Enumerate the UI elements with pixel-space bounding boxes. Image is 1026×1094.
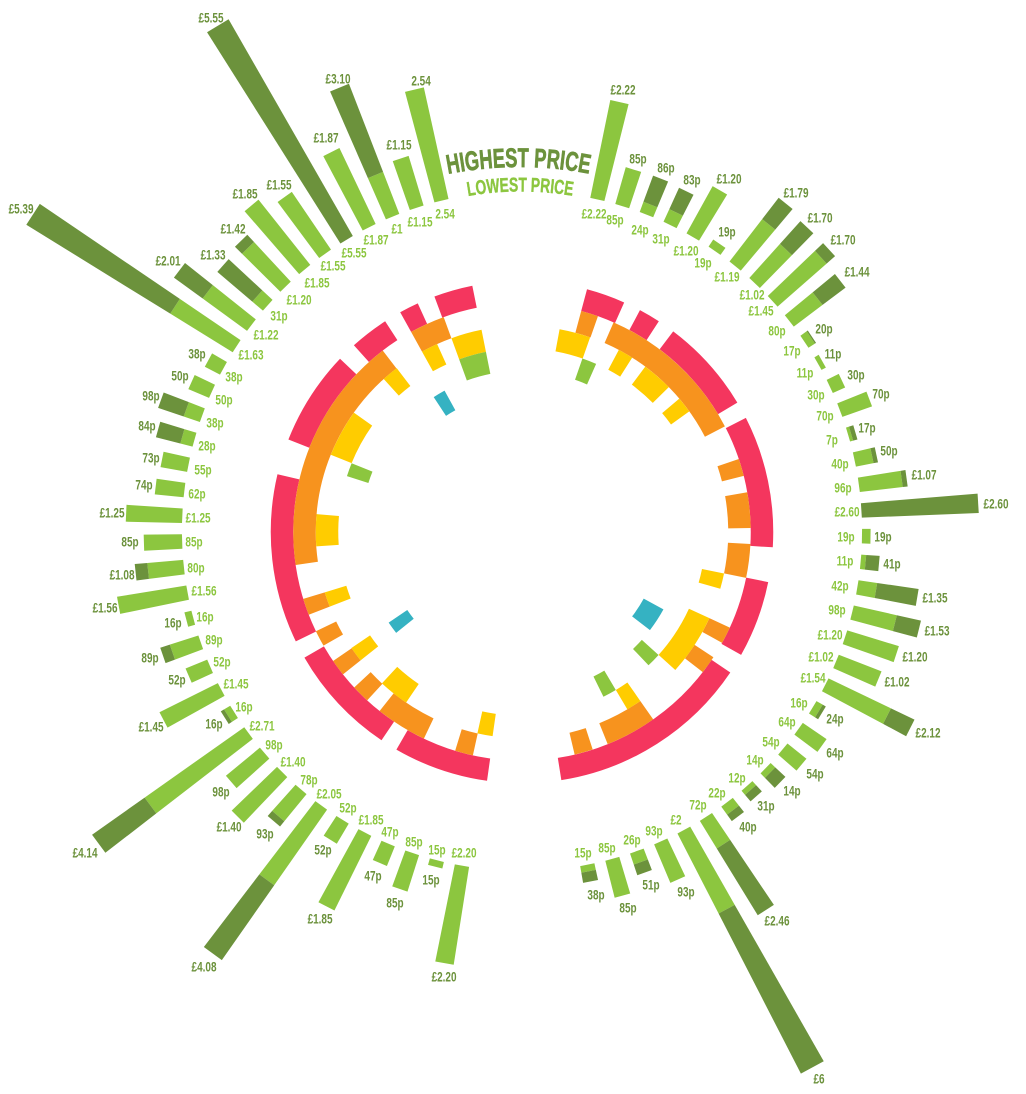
- bar: £1.85: £1.85: [308, 911, 333, 927]
- bar: £1.20: [818, 627, 928, 665]
- bar: 31p / 12p: 12p: [728, 770, 746, 786]
- bar: £1.02: £1.02: [885, 674, 910, 690]
- bar: £2.01 / £1.22: £1.22: [254, 327, 279, 343]
- bar: 85p: 85p: [598, 840, 616, 856]
- bar: £1.56: £1.56: [192, 583, 217, 599]
- bar: £1.44 / 80p: 80p: [768, 323, 786, 339]
- bar: 85p: 85p: [629, 151, 647, 167]
- bar: 50p: [171, 368, 233, 408]
- bar: 15p: 15p: [428, 842, 446, 858]
- bar: 19p: 19p: [874, 529, 892, 545]
- bar: £1.07 / 96p: £1.07: [912, 467, 937, 483]
- bar: 86p / 24p: [631, 160, 675, 238]
- bar: £2.46 / 72p: £2.46: [765, 913, 790, 929]
- bar: £1.35 / 42p: [831, 578, 948, 606]
- bar: 83p / 31p: 83p: [683, 172, 701, 188]
- bar: 52p: [168, 654, 231, 688]
- bar: 41p / 11p: 11p: [837, 553, 853, 569]
- bar: £1.79 / £1.19: £1.19: [715, 269, 740, 285]
- bar: 89p: [141, 632, 223, 666]
- bar: 2.54: 2.54: [411, 73, 431, 89]
- bar: £1.70 / £1.02: [740, 210, 833, 303]
- bar: 40p / 22p: [708, 785, 757, 835]
- bar: 15p: 15p: [422, 872, 440, 888]
- bar: £1.85: £1.85: [233, 186, 258, 202]
- bar: £2.60: £2.60: [835, 504, 860, 520]
- bar: £2.12 / £1.54: £1.54: [801, 670, 826, 686]
- bar: 86p / 24p: 24p: [631, 222, 649, 238]
- bar: £2.60: [835, 494, 1009, 520]
- bar: £1.08 / 80p: [110, 559, 205, 583]
- bar: £6 / £2: £6: [814, 1071, 825, 1087]
- bar: 70p: 70p: [816, 408, 834, 424]
- bar: £1.15: [387, 137, 433, 230]
- bar: 84p / 28p: 84p: [138, 418, 156, 434]
- bar: 41p / 11p: [837, 553, 901, 572]
- bar: 98p: 98p: [212, 784, 230, 800]
- bar: £1.87: £1.87: [314, 130, 339, 146]
- bar: 50p: 50p: [171, 368, 189, 384]
- bar: 16p: 16p: [164, 615, 182, 631]
- bar: 70p: 70p: [872, 386, 890, 402]
- bar: £4.14 / £2.71: £2.71: [250, 718, 275, 734]
- bar: £1.35 / 42p: £1.35: [923, 590, 948, 606]
- bar: £6 / £2: £2: [671, 812, 682, 828]
- radial bars: left half: [9, 10, 477, 985]
- bar: £1.45: £1.45: [139, 719, 164, 735]
- bar: 17p / 7p: 17p: [858, 420, 876, 436]
- bar: £2.22: £2.22: [582, 206, 607, 222]
- bar: £5.39 / £1.63: £5.39: [9, 201, 34, 217]
- bar: 85p: 85p: [185, 534, 203, 550]
- bar: £2.60: £2.60: [984, 496, 1009, 512]
- bar: 38p: 38p: [188, 346, 206, 362]
- bar: £1.70 / £1.02: £1.70: [808, 210, 833, 226]
- bar: 24p / 16p: [790, 695, 844, 727]
- bar: £1.20: £1.20: [717, 171, 742, 187]
- bar: 16p: [164, 609, 214, 631]
- bar: 16p: 16p: [196, 609, 214, 625]
- bar: 40p / 22p: 22p: [708, 785, 726, 801]
- bar: £1.44 / 80p: [768, 264, 870, 339]
- inner ring: green segments: [278, 288, 766, 776]
- bar: £1.42 / £1.20: £1.42: [221, 221, 246, 237]
- bar: 64p: 64p: [826, 745, 844, 761]
- bar: 31p / 12p: 31p: [757, 798, 775, 814]
- bar: 50p: 50p: [215, 392, 233, 408]
- bar: £1.56: £1.56: [93, 600, 118, 616]
- inner ring: orange segments: [215, 225, 829, 839]
- bar: £1.55: £1.55: [267, 177, 292, 193]
- bar: 52p: 52p: [314, 842, 332, 858]
- bar: £1.33 / 31p: [201, 247, 288, 324]
- inner ring: teal segments: [311, 321, 733, 743]
- bar: 86p / 24p: 86p: [657, 160, 675, 176]
- bar: £4.14 / £2.71: [73, 718, 275, 861]
- bar: 52p: 52p: [213, 654, 231, 670]
- bar: 98p / 38p: [142, 388, 224, 431]
- bar: £2.12 / £1.54: £2.12: [916, 725, 941, 741]
- bar: £2.01 / £1.22: £2.01: [156, 253, 181, 269]
- bar: £3.10 / £1: £1: [392, 221, 403, 237]
- bar: £1.40: £1.40: [281, 754, 306, 770]
- bar: £4.08 / £2.05: [192, 786, 342, 975]
- bar: £1.85: £1.85: [359, 812, 384, 828]
- bar: £1.07 / 96p: [834, 467, 937, 496]
- bar: £1.20: £1.20: [674, 243, 699, 259]
- bar: £1.20: [674, 171, 742, 259]
- bar: 2.54: 2.54: [435, 206, 455, 222]
- bar: 93p: 93p: [645, 823, 663, 839]
- bar: £1.25: £1.25: [100, 505, 125, 521]
- bar: £1.33 / 31p: 31p: [270, 308, 288, 324]
- bar: 17p / 7p: [826, 420, 876, 448]
- bar: £1.79 / £1.19: £1.79: [784, 185, 809, 201]
- bar: £1.02: [809, 649, 910, 690]
- bar: 84p / 28p: [138, 418, 216, 454]
- bar: £2.20: £2.20: [432, 969, 457, 985]
- bar: £1.40: £1.40: [217, 819, 242, 835]
- bar: £1.53 / 98p: 98p: [828, 602, 846, 618]
- bar: 85p: 85p: [121, 534, 139, 550]
- bar: 51p / 26p: 51p: [642, 877, 660, 893]
- bar: 38p: [188, 346, 243, 385]
- bar: 24p / 16p: 16p: [790, 695, 808, 711]
- subtitle: lowest price: [466, 177, 574, 196]
- bar: £1.87: [314, 130, 389, 248]
- bar: 83p / 31p: [652, 172, 701, 247]
- inner ring: red segments: [183, 193, 861, 871]
- bar: 52p: 52p: [339, 800, 357, 816]
- bar: 85p: [598, 840, 637, 916]
- bar: £1.85: [233, 186, 330, 291]
- bar: 17p / 7p: 7p: [826, 432, 838, 448]
- bar: 83p / 31p: 31p: [652, 231, 670, 247]
- bar: 93p / 78p: 93p: [256, 826, 274, 842]
- bar: £1.20: £1.20: [818, 627, 843, 643]
- bar: 19p: 19p: [837, 529, 855, 545]
- bar: 93p: 93p: [677, 884, 695, 900]
- bar: £1.15: £1.15: [408, 214, 433, 230]
- bar: 19p: 19p: [694, 255, 712, 271]
- bar: 85p: 85p: [405, 834, 423, 850]
- bar: 19p: [694, 224, 736, 271]
- bar: 74p / 62p: 62p: [188, 486, 206, 502]
- bar: 93p: [645, 823, 695, 900]
- bar: £1.70 / £1.45: £1.70: [831, 232, 856, 248]
- bar: £1.02: £1.02: [809, 649, 834, 665]
- bar: 30p: [807, 367, 865, 403]
- bar: 52p: 52p: [168, 672, 186, 688]
- bar: 89p: 89p: [205, 632, 223, 648]
- bar: 14p / 14p: 14p: [746, 752, 764, 768]
- bar: 14p / 14p: [746, 752, 801, 799]
- bar: 89p: 89p: [141, 650, 159, 666]
- bar: £1.85: [308, 812, 384, 927]
- bar: £1.55: [267, 177, 346, 274]
- bar: 2.54: [405, 73, 455, 222]
- bar: 11p: 11p: [825, 346, 841, 362]
- bar: 85p: 85p: [619, 900, 637, 916]
- bar: 84p / 28p: 28p: [198, 438, 216, 454]
- bar: 98p: 98p: [265, 737, 283, 753]
- bar: 38p / 15p: 15p: [574, 845, 592, 861]
- bar: 85p: [386, 834, 423, 911]
- title: highest price: HIGHEST PRICE: [446, 148, 592, 174]
- bar: 98p / 38p: 38p: [206, 415, 224, 431]
- bar: 64p: 64p: [778, 714, 796, 730]
- bar: £1.55: £1.55: [321, 258, 346, 274]
- bar: £1.07 / 96p: 96p: [834, 480, 852, 496]
- bar: 51p / 26p: 26p: [623, 832, 641, 848]
- bar: 38p: 38p: [225, 369, 243, 385]
- bar: £1.56: [93, 583, 217, 616]
- bar: 20p / 17p: 20p: [815, 321, 833, 337]
- bar: £2.46 / 72p: [689, 797, 790, 929]
- bar: 85p: 85p: [386, 895, 404, 911]
- bar: 16p: 16p: [205, 716, 223, 732]
- bar: 40p / 22p: 40p: [739, 819, 757, 835]
- bar: 20p / 17p: 17p: [783, 343, 801, 359]
- bar: £1.42 / £1.20: £1.20: [287, 292, 312, 308]
- bar: 98p: [212, 737, 283, 800]
- bar: £1.45: £1.45: [224, 676, 249, 692]
- bar: £1.45: [139, 676, 249, 735]
- bar: £1.53 / 98p: [828, 602, 950, 639]
- bar: 70p: [816, 386, 890, 424]
- bar: 50p / 40p: 50p: [880, 443, 898, 459]
- bar: £5.55: £5.55: [199, 10, 224, 26]
- bar: £1.15: £1.15: [387, 137, 412, 153]
- bar: 38p / 15p: [574, 845, 605, 903]
- bar: £1.87: £1.87: [364, 232, 389, 248]
- bar: £2.22: [582, 82, 636, 222]
- bar: 85p: 85p: [606, 212, 624, 228]
- bar: 74p / 62p: [135, 477, 206, 502]
- bar: 64p: [778, 714, 844, 761]
- bar: 93p / 78p: 78p: [300, 772, 318, 788]
- bar: £1.08 / 80p: 80p: [187, 560, 205, 576]
- bar: £1.70 / £1.45: £1.45: [749, 303, 774, 319]
- inner ring: yellow segments: [247, 257, 797, 807]
- bar: 51p / 26p: [623, 832, 660, 893]
- bar: £1.08 / 80p: £1.08: [110, 567, 135, 583]
- bar: £5.55: [199, 10, 367, 261]
- bar: 30p: 30p: [807, 387, 825, 403]
- bar: £1.35 / 42p: 42p: [831, 578, 849, 594]
- bar: £2.46 / 72p: 72p: [689, 797, 707, 813]
- bar: £1.53 / 98p: £1.53: [925, 623, 950, 639]
- bar: 52p: [314, 800, 357, 858]
- bar: 31p / 12p: [728, 770, 775, 814]
- bar: 11p: 11p: [797, 365, 813, 381]
- bar: £5.39 / £1.63: [9, 201, 264, 363]
- bar: £5.39 / £1.63: £1.63: [239, 347, 264, 363]
- bar: 47p: 47p: [364, 868, 382, 884]
- bar: £4.08 / £2.05: £4.08: [192, 959, 217, 975]
- bar: 16p: [205, 699, 253, 732]
- bar: £1.42 / £1.20: [221, 221, 312, 308]
- bar: 85p: [606, 151, 647, 228]
- bar: £2.22: £2.22: [611, 82, 636, 98]
- bar: 74p / 62p: 74p: [135, 477, 153, 493]
- bar: £4.08 / £2.05: £2.05: [317, 786, 342, 802]
- bar: 85p: [121, 533, 203, 551]
- bar: £1.70 / £1.45: [749, 232, 856, 319]
- bar: 93p / 78p: [256, 772, 318, 842]
- bar: £3.10 / £1: £3.10: [326, 71, 351, 87]
- bar: £1.20: £1.20: [903, 649, 928, 665]
- bar: 41p / 11p: 41p: [883, 556, 901, 572]
- bar: £2.12 / £1.54: [801, 670, 941, 741]
- bar: £1.25: [100, 505, 211, 526]
- bar: £5.55: £5.55: [342, 245, 367, 261]
- bar: 98p / 38p: 98p: [142, 388, 160, 404]
- bar: 20p / 17p: [783, 321, 833, 359]
- bar: £1.79 / £1.19: [715, 185, 809, 285]
- bar: 47p: [364, 824, 399, 884]
- bar: 50p / 40p: [831, 443, 898, 472]
- bar: £1.44 / 80p: £1.44: [845, 264, 870, 280]
- bar: £1.40: [217, 754, 306, 835]
- bar: 14p / 14p: 14p: [783, 783, 801, 799]
- bar: £2.20: [432, 845, 477, 985]
- bar: 19p: 19p: [718, 224, 736, 240]
- bar: 50p / 40p: 40p: [831, 456, 849, 472]
- radial bars: right half: [574, 82, 1009, 1087]
- bar: 54p: 54p: [762, 734, 780, 750]
- bar: 54p: [762, 734, 824, 782]
- bar: 24p / 16p: 24p: [826, 711, 844, 727]
- bar: 73p / 55p: 55p: [194, 462, 212, 478]
- bar: £2.01 / £1.22: [156, 253, 279, 343]
- subtitle: lowest price: LOWEST PRICE: [466, 177, 574, 196]
- bar: £1.25: £1.25: [186, 510, 211, 526]
- bar: 73p / 55p: 73p: [142, 450, 160, 466]
- bar: £1.85: £1.85: [305, 275, 330, 291]
- bar: 73p / 55p: [142, 450, 212, 478]
- bar: 47p: 47p: [381, 824, 399, 840]
- bar: £1.33 / 31p: £1.33: [201, 247, 226, 263]
- bar: 16p: 16p: [235, 699, 253, 715]
- bar: £4.14 / £2.71: £4.14: [73, 845, 98, 861]
- bar: 11p: [797, 346, 841, 381]
- bar: £6 / £2: [671, 812, 825, 1087]
- bar: £1.70 / £1.02: £1.02: [740, 287, 765, 303]
- title: highest price: [446, 148, 592, 174]
- bar: 54p: 54p: [806, 766, 824, 782]
- bar: 19p: [837, 529, 892, 545]
- bar: £2.20: £2.20: [452, 845, 477, 861]
- bar: 15p: [422, 842, 446, 888]
- bar: 38p / 15p: 38p: [587, 887, 605, 903]
- bar: 30p: 30p: [847, 367, 865, 383]
- bar: £3.10 / £1: [326, 71, 403, 237]
